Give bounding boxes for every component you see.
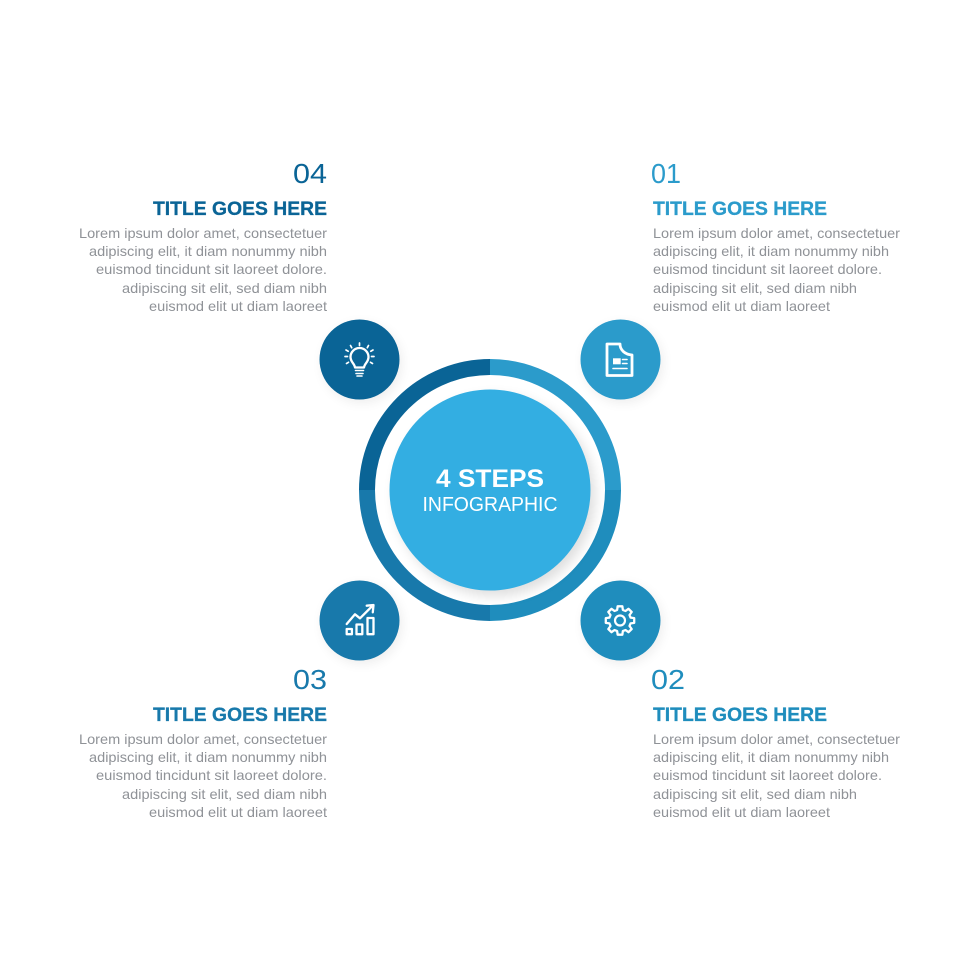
body text 04: euismod elit ut diam laoreet (149, 299, 327, 314)
body text 03 (79, 732, 327, 820)
panel: step 03 text (79, 664, 327, 820)
body text 04: adipiscing sit elit, sed diam nibh (122, 281, 327, 296)
body text 01: adipiscing sit elit, sed diam nibh (653, 281, 857, 296)
center title: 4 STEPS (436, 465, 544, 493)
number 04: 04 (293, 158, 327, 189)
body text 03: adipiscing sit elit, sed diam nibh (122, 787, 327, 802)
body text 03: euismod elit ut diam laoreet (149, 805, 327, 820)
body text 03: euismod tincidunt sit laoreet dolore. (96, 768, 327, 783)
body text 02: euismod elit ut diam laoreet (653, 805, 830, 820)
heading 01: TITLE GOES HERE (653, 198, 827, 220)
number 03: 03 (293, 664, 327, 695)
panel: step 01 text (651, 158, 900, 314)
body text 04: euismod tincidunt sit laoreet dolore. (96, 262, 327, 277)
segmented ring (367, 367, 613, 613)
icon: gear (606, 606, 634, 635)
panel: step 02 text (651, 664, 900, 820)
central circle (390, 390, 595, 596)
icon: growth chart (347, 605, 374, 634)
heading 04: TITLE GOES HERE (153, 198, 327, 220)
body text 02 (653, 732, 900, 820)
body text 04 (79, 226, 327, 314)
body text 04: Lorem ipsum dolor amet, consectetuer (79, 226, 327, 241)
body text 04: adipiscing elit, it diam nonummy nibh (89, 244, 327, 259)
body text 02: adipiscing elit, it diam nonummy nibh (653, 750, 889, 765)
body text 02: Lorem ipsum dolor amet, consectetuer (653, 732, 900, 747)
body text 01: euismod tincidunt sit laoreet dolore. (653, 262, 882, 277)
body text 01: adipiscing elit, it diam nonummy nibh (653, 244, 889, 259)
number 01: 01 (651, 158, 681, 189)
step 04 badge (320, 320, 401, 402)
heading 03: TITLE GOES HERE (153, 704, 327, 726)
heading 02: TITLE GOES HERE (653, 704, 827, 726)
panel: step 04 text (79, 158, 327, 314)
icon: document (607, 344, 632, 376)
body text 02: euismod tincidunt sit laoreet dolore. (653, 768, 882, 783)
center subtitle: INFOGRAPHIC (422, 494, 558, 516)
number 02: 02 (651, 664, 685, 695)
step 03 badge (320, 580, 401, 663)
icon: light bulb (345, 343, 374, 376)
body text 01 (653, 226, 900, 314)
step 02 badge (580, 580, 662, 663)
body text 03: Lorem ipsum dolor amet, consectetuer (79, 732, 327, 747)
body text 01: euismod elit ut diam laoreet (653, 299, 830, 314)
body text 03: adipiscing elit, it diam nonummy nibh (89, 750, 327, 765)
body text 02: adipiscing sit elit, sed diam nibh (653, 787, 857, 802)
body text 01: Lorem ipsum dolor amet, consectetuer (653, 226, 900, 241)
step 01 badge (580, 320, 662, 402)
